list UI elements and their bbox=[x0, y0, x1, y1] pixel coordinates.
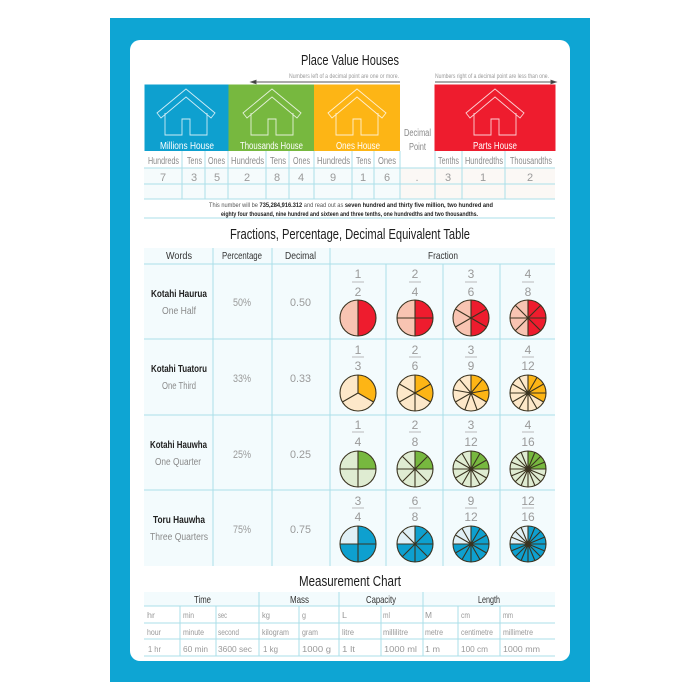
column headers: Hundreds bbox=[231, 156, 264, 167]
unit equivalents: 1 lt bbox=[342, 644, 356, 654]
fraction 3/12 bbox=[453, 418, 489, 487]
unit abbreviations: min bbox=[183, 610, 194, 620]
unit names: metre bbox=[425, 627, 443, 637]
fraction 4/8: 4 bbox=[525, 267, 532, 281]
fraction 9/12: 9 bbox=[468, 494, 475, 508]
label: decimal point: Point bbox=[409, 142, 426, 153]
column headers: Ones bbox=[378, 156, 396, 167]
unit abbreviations: g bbox=[302, 610, 306, 620]
unit equivalents: 60 min bbox=[183, 644, 208, 654]
unit abbreviations: kg bbox=[262, 610, 270, 620]
column headers: Hundreds bbox=[317, 156, 350, 167]
fraction 4/8 bbox=[510, 267, 546, 336]
fraction 4/16: 16 bbox=[521, 435, 535, 449]
fraction 3/9: 9 bbox=[468, 359, 475, 373]
fraction 2/4 bbox=[397, 267, 433, 336]
column headers: Tenths bbox=[438, 156, 459, 167]
row: three quarters: 75% bbox=[233, 524, 251, 536]
row: three quarters: 0.75 bbox=[290, 524, 311, 536]
row: one quarter: 0.25 bbox=[290, 449, 311, 461]
row: three quarters: Three Quarters bbox=[150, 532, 208, 543]
digits row: 1 bbox=[360, 172, 366, 184]
row: three quarters: Toru Hauwha bbox=[153, 514, 205, 526]
fraction 3/9 bbox=[453, 343, 489, 411]
row: one third: Kotahi Tuatoru bbox=[151, 363, 207, 375]
digits row: 3 bbox=[191, 172, 197, 184]
fraction 3/6: 3 bbox=[468, 267, 475, 281]
row: one half: 50% bbox=[233, 297, 251, 309]
unit equivalents bbox=[148, 644, 540, 654]
fraction 1/4: 4 bbox=[355, 435, 362, 449]
heading: fractions table: Fractions, Percentage, Decimal Equivalent Table bbox=[230, 226, 470, 243]
place value grid bbox=[144, 151, 555, 218]
column headers: Tens bbox=[187, 156, 202, 167]
row: one quarter: One Quarter bbox=[155, 457, 202, 468]
unit names: minute bbox=[183, 627, 204, 637]
house: ones bbox=[314, 84, 400, 152]
digits row: 4 bbox=[298, 172, 304, 184]
digits row: 5 bbox=[214, 172, 220, 184]
label: decimal point bbox=[404, 128, 431, 153]
row: one third: 0.33 bbox=[290, 373, 311, 385]
fraction 3/4: 3 bbox=[355, 494, 362, 508]
measurement headers: Length bbox=[478, 594, 500, 606]
unit names: kilogram bbox=[262, 627, 289, 637]
unit names: hour bbox=[147, 627, 161, 637]
unit names: millimetre bbox=[503, 627, 533, 637]
fraction 3/6: 6 bbox=[468, 285, 475, 299]
fraction 9/12: 12 bbox=[464, 510, 478, 524]
table background and grid bbox=[144, 248, 555, 566]
fraction 1/3: 1 bbox=[355, 343, 362, 357]
house: millions: Millions House bbox=[160, 141, 214, 152]
fraction 2/8: 2 bbox=[412, 418, 419, 432]
fraction 2/6 bbox=[397, 343, 433, 411]
unit abbreviations: sec bbox=[218, 610, 228, 620]
fraction 6/8: 6 bbox=[412, 494, 419, 508]
row: one half: Kotahi Haurua bbox=[151, 288, 207, 300]
poster border bbox=[110, 18, 590, 682]
digits row: 8 bbox=[274, 172, 280, 184]
fraction 2/4: 4 bbox=[412, 285, 419, 299]
fraction 1/2: 2 bbox=[355, 285, 362, 299]
digits row: 3 bbox=[445, 172, 451, 184]
unit equivalents: 1000 g bbox=[302, 644, 331, 654]
column headers: Hundreds bbox=[148, 156, 179, 167]
explanation sentence bbox=[209, 203, 493, 218]
fraction 3/12: 12 bbox=[464, 435, 478, 449]
panel: fractions table bbox=[144, 226, 555, 566]
column headers: Thousandths bbox=[510, 156, 552, 167]
unit abbreviations: mm bbox=[503, 610, 513, 620]
digits row: 1 bbox=[480, 172, 486, 184]
house: parts bbox=[434, 84, 556, 152]
digits row: 6 bbox=[384, 172, 390, 184]
explanation sentence: eighty four thousand, nine hundred and sixteen and three tenths, one hundredths and two thousandths. bbox=[221, 212, 478, 218]
fraction 2/4: 2 bbox=[412, 267, 419, 281]
fraction 6/8: 8 bbox=[412, 510, 419, 524]
row: one third: 33% bbox=[233, 373, 251, 385]
unit abbreviations: ml bbox=[383, 610, 390, 620]
label: decimal point: Decimal bbox=[404, 128, 431, 139]
digits row: 7 bbox=[160, 172, 166, 184]
fraction 1/4 bbox=[340, 418, 376, 487]
fraction 4/16: 4 bbox=[525, 418, 532, 432]
unit names: litre bbox=[342, 627, 354, 637]
fraction 2/6: 6 bbox=[412, 359, 419, 373]
fraction 4/12: 12 bbox=[521, 359, 535, 373]
arrow: pointing left bbox=[251, 80, 400, 84]
unit names bbox=[147, 627, 533, 637]
house: thousands bbox=[228, 84, 314, 152]
unit abbreviations: M bbox=[425, 610, 432, 620]
table headers: Percentage bbox=[222, 250, 262, 262]
row: one third bbox=[151, 343, 546, 411]
row: one half: 0.50 bbox=[290, 297, 311, 309]
note: numbers right of decimal point: Numbers right of a decimal point are less than one. bbox=[435, 74, 549, 80]
house: thousands: Thousands House bbox=[240, 141, 303, 152]
fraction 3/9: 3 bbox=[468, 343, 475, 357]
measurement headers: Time bbox=[194, 594, 211, 606]
fraction 12/16: 16 bbox=[521, 510, 535, 524]
table headers: Decimal bbox=[285, 250, 316, 262]
arrow: pointing right bbox=[435, 80, 556, 84]
heading: measurement chart: Measurement Chart bbox=[299, 573, 402, 590]
fraction 3/12: 3 bbox=[468, 418, 475, 432]
row: one third: One Third bbox=[162, 381, 196, 392]
fraction 4/8: 8 bbox=[525, 285, 532, 299]
unit names: millilitre bbox=[383, 627, 408, 637]
table headers: Words bbox=[166, 250, 192, 262]
measurement headers: Capacity bbox=[366, 594, 397, 606]
digits row: 9 bbox=[330, 172, 336, 184]
fraction 2/8: 8 bbox=[412, 435, 419, 449]
panel: measurement chart bbox=[144, 573, 555, 656]
house: ones: Ones House bbox=[336, 141, 380, 152]
unit names: centimetre bbox=[461, 627, 493, 637]
column headers: Ones bbox=[208, 156, 225, 167]
column headers: Tens bbox=[356, 156, 371, 167]
unit equivalents: 100 cm bbox=[461, 644, 488, 654]
row: one half: One Half bbox=[162, 306, 196, 317]
table headers bbox=[166, 250, 458, 262]
fraction 9/12 bbox=[453, 494, 489, 562]
fraction 3/6 bbox=[453, 267, 489, 336]
fraction 6/8 bbox=[397, 494, 433, 562]
unit equivalents: 1 kg bbox=[263, 644, 278, 654]
fraction 2/6: 2 bbox=[412, 343, 419, 357]
unit equivalents: 1 hr bbox=[148, 644, 161, 654]
explanation sentence: This number will be 735,284,916.312 and read out as seven hundred and thirty five million, two hundred and bbox=[209, 203, 493, 209]
row: one quarter: 25% bbox=[233, 449, 251, 461]
measurement headers bbox=[194, 594, 500, 606]
unit equivalents: 1000 ml bbox=[384, 644, 417, 654]
unit abbreviations: L bbox=[342, 610, 347, 620]
fraction 4/12: 4 bbox=[525, 343, 532, 357]
fraction 1/2: 1 bbox=[355, 267, 362, 281]
unit names: gram bbox=[302, 627, 318, 637]
digits row bbox=[160, 172, 533, 184]
fraction 4/16 bbox=[510, 418, 546, 487]
fraction 12/16: 12 bbox=[521, 494, 535, 508]
table headers: Fraction bbox=[428, 250, 458, 262]
fraction 4/12 bbox=[510, 343, 546, 411]
house: millions bbox=[144, 84, 228, 152]
unit abbreviations: cm bbox=[461, 610, 470, 620]
house: parts: Parts House bbox=[473, 141, 517, 152]
unit abbreviations bbox=[147, 610, 513, 620]
unit abbreviations: hr bbox=[147, 610, 155, 620]
column headers: Hundredths bbox=[465, 156, 503, 167]
fraction 1/3: 3 bbox=[355, 359, 362, 373]
fraction 1/3 bbox=[340, 343, 376, 411]
unit equivalents: 1000 mm bbox=[503, 644, 540, 654]
fraction 12/16 bbox=[510, 494, 546, 562]
row: one half bbox=[151, 267, 546, 336]
column headers: Tens bbox=[270, 156, 286, 167]
unit names: second bbox=[218, 627, 239, 637]
panel: place value houses bbox=[144, 52, 556, 218]
measurement headers: Mass bbox=[290, 594, 309, 606]
digits row: 2 bbox=[527, 172, 533, 184]
fraction 1/2 bbox=[340, 267, 376, 336]
fraction 3/4: 4 bbox=[355, 510, 362, 524]
unit equivalents: 1 m bbox=[425, 644, 440, 654]
fraction 1/4: 1 bbox=[355, 418, 362, 432]
digits row: . bbox=[415, 172, 419, 184]
column headers: Ones bbox=[293, 156, 310, 167]
white content panel bbox=[130, 40, 570, 661]
fraction 2/8 bbox=[397, 418, 433, 487]
note: numbers left of decimal point: Numbers left of a decimal point are one or more. bbox=[289, 74, 399, 80]
row: one quarter: Kotahi Hauwha bbox=[150, 439, 207, 451]
row: three quarters bbox=[150, 494, 546, 562]
unit equivalents: 3600 sec bbox=[218, 644, 253, 654]
heading: place value houses: Place Value Houses bbox=[301, 52, 399, 69]
measurement grid bbox=[144, 592, 555, 656]
row: one quarter bbox=[150, 418, 546, 487]
fraction 3/4 bbox=[340, 494, 376, 562]
column headers bbox=[148, 156, 552, 167]
digits row: 2 bbox=[244, 172, 250, 184]
